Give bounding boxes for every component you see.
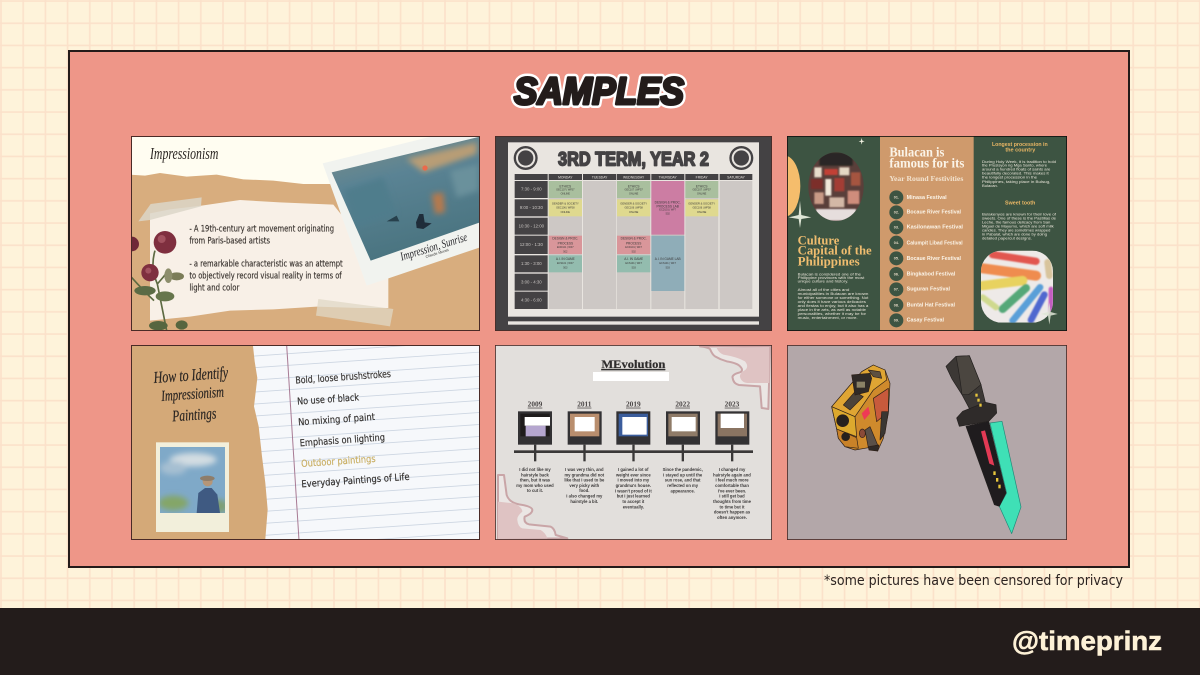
entry 2011: like that I used to be: [564, 478, 605, 483]
timetable: THURSDAY: [659, 175, 677, 179]
brochure right text: beautifully decorated. This makes it: [982, 171, 1050, 176]
script heading: Paintings: [171, 405, 217, 425]
entry 2009: then, but it was: [520, 478, 551, 483]
handwritten list: No use of black: [297, 392, 360, 408]
card: MEvolution timeline: [495, 345, 772, 540]
brochure left text: only does it have various delicacies: [798, 299, 866, 304]
brochure right text: Philippines, taking place in Bulsug,: [982, 179, 1050, 184]
timetable: 503: [632, 267, 636, 270]
festival list: Buntal Hat Festival: [907, 303, 956, 309]
brochure right text: in Pabalat, which are done by doing: [982, 231, 1047, 236]
entry 2019: I moved into my: [618, 478, 650, 483]
entry 2019: weight ever since: [615, 472, 651, 477]
timetable: ONLINE: [697, 211, 707, 214]
entry 2011: [564, 400, 605, 504]
festival list: Suguran Festival: [907, 286, 951, 292]
illustration: orange gun: [832, 365, 890, 451]
brochure right text: Bulakenyos are known for their love of: [982, 211, 1057, 216]
body text: to objectively record visual reality in terms of: [189, 272, 342, 282]
entry 2022: appearance.: [671, 488, 695, 493]
entry 2009: hairstyle back: [521, 472, 550, 477]
brochure right text: detailed papercut designs.: [982, 235, 1032, 240]
timetable: WEDNESDAY: [623, 175, 645, 179]
brochure left text: Philippine provinces with the most: [798, 275, 865, 280]
brochure left text: for either someone or something. Not: [798, 295, 869, 300]
body text: - A 19th-century art movement originating: [189, 224, 334, 234]
timetable: DESIGN & PROC.: [655, 200, 681, 204]
entry 2019: [615, 400, 652, 509]
brochure center heading: famous for its: [889, 155, 964, 170]
brochure center heading: Bulacan is: [889, 145, 944, 160]
brochure left text: unique culture and history.: [798, 279, 848, 284]
script heading: [152, 363, 229, 425]
festival list: 05.: [894, 257, 899, 261]
brochure right text: sweets. One of these is the Pastillas de: [982, 215, 1057, 220]
timetable: GENDER & SOCIETY: [620, 202, 647, 206]
brochure left text: place in the arts, as well as notable: [798, 307, 867, 312]
festival list: 07.: [894, 288, 899, 292]
body text: light and color: [189, 284, 240, 294]
timetable: ECS101 | WF7: [557, 262, 574, 265]
brochure left heading: Philippines: [798, 254, 860, 268]
brochure left text: music, entertainment, or more.: [798, 315, 858, 320]
entry 2023: I've ever been.: [718, 488, 746, 493]
timetable: PROCESS LAB: [657, 204, 679, 208]
brochure left heading: Capital of the: [798, 244, 872, 258]
entry 2023: doesn't happen as: [714, 510, 751, 515]
entry 2011: my grandma did not: [564, 472, 605, 477]
festival list: 01.: [894, 196, 899, 200]
timetable: ONLINE: [697, 192, 707, 195]
brochure left heading: [798, 234, 872, 268]
sweets photo: [981, 251, 1053, 323]
festival photo: [808, 152, 864, 221]
timetable: PROCESS: [558, 241, 573, 245]
handle: @timeprinz: [1012, 626, 1162, 656]
brochure left text: municipalities in Bulacan are known: [798, 291, 868, 296]
festival list: Bocaue River Festival: [907, 210, 962, 216]
timetable: 3:00 - 4:30: [521, 279, 542, 284]
icon: right target: [729, 146, 753, 170]
timetable: ETHICS: [628, 184, 639, 188]
polaroid of Impression, Sunrise: [323, 136, 482, 286]
entry 2019: I gained a lot of: [618, 467, 649, 472]
timetable: 12:00 - 1:30: [520, 242, 543, 247]
tape bottom: [316, 299, 393, 326]
handwritten list: [295, 369, 410, 490]
brochure right text: Leche, the famous delicacy from San: [982, 219, 1050, 224]
entry 2009: [516, 400, 554, 493]
decorative corner top right: [700, 346, 770, 409]
kraft paper background: [130, 173, 482, 334]
star sparkle right: [1041, 302, 1058, 325]
illustration: teal combat knife: [946, 356, 1021, 534]
entry 2023: [713, 400, 752, 520]
brochure right text: around a hundred floats of saints are: [982, 167, 1051, 172]
icon: left target: [514, 146, 538, 170]
timetable: GEC107 | WF57: [556, 189, 575, 192]
entry 2009: I did not like my: [519, 467, 551, 472]
brochure left text: personalities, whether it may be for: [798, 311, 867, 316]
entry 2022: I stayed up until the: [663, 472, 703, 477]
timetable: FRIDAY: [696, 175, 708, 179]
entry 2023: to time but it: [720, 504, 745, 509]
brochure right text: Longest procession in: [992, 142, 1048, 148]
entry 2023: comfortable than: [715, 483, 749, 488]
handwritten list: Outdoor paintings: [301, 454, 376, 470]
brochure center heading: [889, 145, 964, 183]
center column: [880, 134, 974, 334]
timetable: A.I. IN GAME: [556, 257, 575, 261]
entry 2009: 2009: [528, 400, 543, 409]
card: class schedule: [495, 136, 772, 331]
brochure left text: Almost all of the cities and: [798, 287, 849, 292]
torn white paper: [150, 200, 388, 321]
festival list: 02.: [894, 211, 899, 215]
entry 2022: [663, 400, 703, 493]
handwritten list: Emphasis on lighting: [299, 432, 385, 449]
polaroid of Impression, Sunrise: Claude Monet: [425, 248, 449, 259]
timetable: DESIGN & PROC.: [621, 236, 647, 240]
timetable: GEC107 | WF57: [625, 189, 643, 192]
slide heading: Impressionism: [149, 144, 218, 163]
timetable: TUESDAY: [592, 175, 608, 179]
entry 2011: very picky with: [569, 483, 600, 488]
timetable: ONLINE: [561, 211, 570, 214]
card: impressionism slide: [131, 136, 480, 331]
script heading: Impressionism: [160, 384, 224, 405]
handwritten list: Bold, loose brushstrokes: [295, 369, 391, 387]
entry 2009: my mom who used: [516, 483, 554, 488]
timetable: GEC106 | WF58: [625, 207, 643, 210]
script heading: How to Identify: [152, 363, 229, 387]
brochure left text: and fiestas to enjoy, but it also has a: [798, 303, 869, 308]
handwritten list: No mixing of paint: [298, 412, 376, 428]
entry 2019: grandma's house.: [616, 483, 651, 488]
card: how to identify impressionism: [131, 345, 480, 540]
brochure right text: the longest procession in the: [982, 175, 1038, 180]
polaroid of woman painting: [156, 442, 229, 532]
timetable: 10:30 - 12:00: [519, 223, 545, 228]
entry 2023: often anymore.: [717, 515, 747, 520]
timetable: PROCESS: [626, 241, 641, 245]
privacy note: *some pictures have been censored for privacy: [824, 573, 1123, 589]
festival list: 08.: [894, 303, 899, 307]
entry 2022: sun rose, and that: [665, 478, 701, 483]
festival list: 03.: [894, 226, 899, 230]
censored subtitle box: [593, 372, 669, 381]
star sparkle top: [859, 138, 865, 145]
brochure right text: the country: [1005, 147, 1036, 153]
entry 2022: reflected on my: [667, 483, 699, 488]
timetable: ETHICS: [560, 184, 571, 188]
timetable: 1:30 - 3:00: [521, 261, 542, 266]
entry 2011: hairstyle a bit.: [570, 499, 598, 504]
body text: [189, 224, 343, 294]
timetable: A.I. IN GAME LAB: [655, 257, 681, 261]
timetable: ONLINE: [561, 192, 570, 195]
notebook ruled lines: [250, 340, 482, 547]
timetable: 503: [563, 267, 568, 270]
body text: - a remarkable characteristic was an attempt: [189, 260, 343, 270]
schedule heading: 3RD TERM, YEAR 2: [558, 149, 709, 170]
festival list: 09.: [894, 319, 899, 323]
entry 2023: 2023: [725, 400, 740, 409]
star sparkle left: [789, 201, 811, 228]
timetable: GENDER & SOCIETY: [552, 202, 579, 206]
card: Bulacan brochure: [787, 136, 1067, 331]
timetable: ONLINE: [629, 192, 639, 195]
timetable: GEC106 | WF58: [556, 207, 575, 210]
festival list: Kasilonawan Festival: [907, 224, 964, 230]
brochure right text: Miguel de Mayumo, which are soft milk: [982, 223, 1054, 228]
brochure left text: Bulacan is considered one of the: [798, 272, 862, 277]
entry 2011: I was very thin, and: [565, 467, 604, 472]
timetable: ECD101 | WF7: [659, 208, 677, 211]
timetable: A.I. IN GAME: [624, 257, 643, 261]
festival list: 04.: [894, 241, 899, 245]
entry 2019: but I just learned: [617, 494, 650, 499]
decorative corner bottom left: [498, 475, 567, 539]
festival list: Bocaue River Festival: [907, 256, 962, 262]
timetable: 4:30 - 6:00: [521, 297, 542, 302]
timetable: MONDAY: [558, 175, 573, 179]
brochure right text: candies. They are sometimes wrapped: [982, 227, 1050, 232]
entry 2023: I still get bad: [719, 494, 745, 499]
entry 2023: hairstyle again and: [713, 472, 751, 477]
entry 2009: to cut it.: [527, 488, 543, 493]
festival list: Casay Festival: [907, 318, 945, 324]
brochure center heading: Year Round Festivities: [889, 174, 963, 183]
brochure right text: During Holy Week, it is tradition to hold: [982, 159, 1056, 164]
timetable: ECD101 | WF7: [557, 246, 574, 249]
timetable: ETHICS: [696, 184, 707, 188]
timetable: ECS101 | WF7: [625, 262, 643, 265]
timetable: GENDER & SOCIETY: [688, 202, 715, 206]
timetable: DESIGN & PROC.: [552, 236, 578, 240]
entry 2019: to accept it: [622, 499, 645, 504]
title: samples: SAMPLES: [514, 71, 684, 113]
title: samples: SAMPLES: [514, 71, 684, 113]
timetable: [515, 174, 752, 309]
festival list: Bingkabod Festival: [907, 272, 956, 278]
timeline heading: MEvolution: [601, 357, 666, 371]
timetable: GEC107 | WF57: [693, 189, 711, 192]
timetable: SATURDAY: [727, 175, 746, 179]
card: game weapon concepts: [787, 345, 1067, 540]
handwritten list: Everyday Paintings of Life: [301, 472, 410, 490]
flowers illustration: [124, 231, 188, 334]
brochure left heading: Culture: [798, 234, 840, 248]
festival list: 06.: [894, 272, 899, 276]
brochure left text: [798, 272, 869, 320]
footer bar: [0, 608, 1200, 675]
entry 2023: I feel much more: [715, 478, 749, 483]
festival list: Calumpit Libad Festival: [907, 240, 963, 246]
body text: from Paris-based artists: [189, 236, 270, 246]
entry 2011: I also changed my: [566, 494, 603, 499]
timetable: GEC106 | WF58: [693, 207, 711, 210]
timetable: 502: [632, 251, 636, 254]
entry 2011: food.: [579, 488, 589, 493]
entry 2019: eventually.: [623, 504, 644, 509]
timetable: 502: [666, 212, 670, 215]
brochure right text: Sweet tooth: [1005, 201, 1035, 207]
entry 2023: thoughts from time: [713, 499, 752, 504]
entry 2022: Since the pandemic,: [663, 467, 703, 472]
festival list: Minasa Festival: [907, 195, 947, 201]
entry 2023: I changed my: [719, 467, 746, 472]
timetable: 7:30 - 9:00: [521, 187, 542, 192]
panel: samples: [69, 51, 1129, 567]
brochure right text: Bulacan.: [982, 183, 998, 188]
timetable: 9:00 - 10:30: [520, 205, 543, 210]
timetable: 502: [563, 251, 568, 254]
tape top: [138, 197, 202, 221]
brochure right text: [982, 142, 1057, 240]
festival list: [889, 190, 964, 327]
timetable: ECD101 | WF7: [625, 246, 643, 249]
orange half circle: [786, 156, 800, 217]
timetable: ONLINE: [629, 211, 639, 214]
timetable: 503: [666, 267, 670, 270]
torn kraft paper: [130, 343, 268, 543]
timeline axis: [514, 445, 753, 461]
timetable: ECS101 | WF7: [659, 262, 677, 265]
brochure right text: the Prusisyon ng Mga Santo, where: [982, 163, 1048, 168]
entry 2019: I wasn't proud of it: [615, 488, 652, 493]
entry 2019: 2019: [626, 400, 641, 409]
entry 2022: 2022: [675, 400, 690, 409]
entry 2011: 2011: [577, 400, 592, 409]
